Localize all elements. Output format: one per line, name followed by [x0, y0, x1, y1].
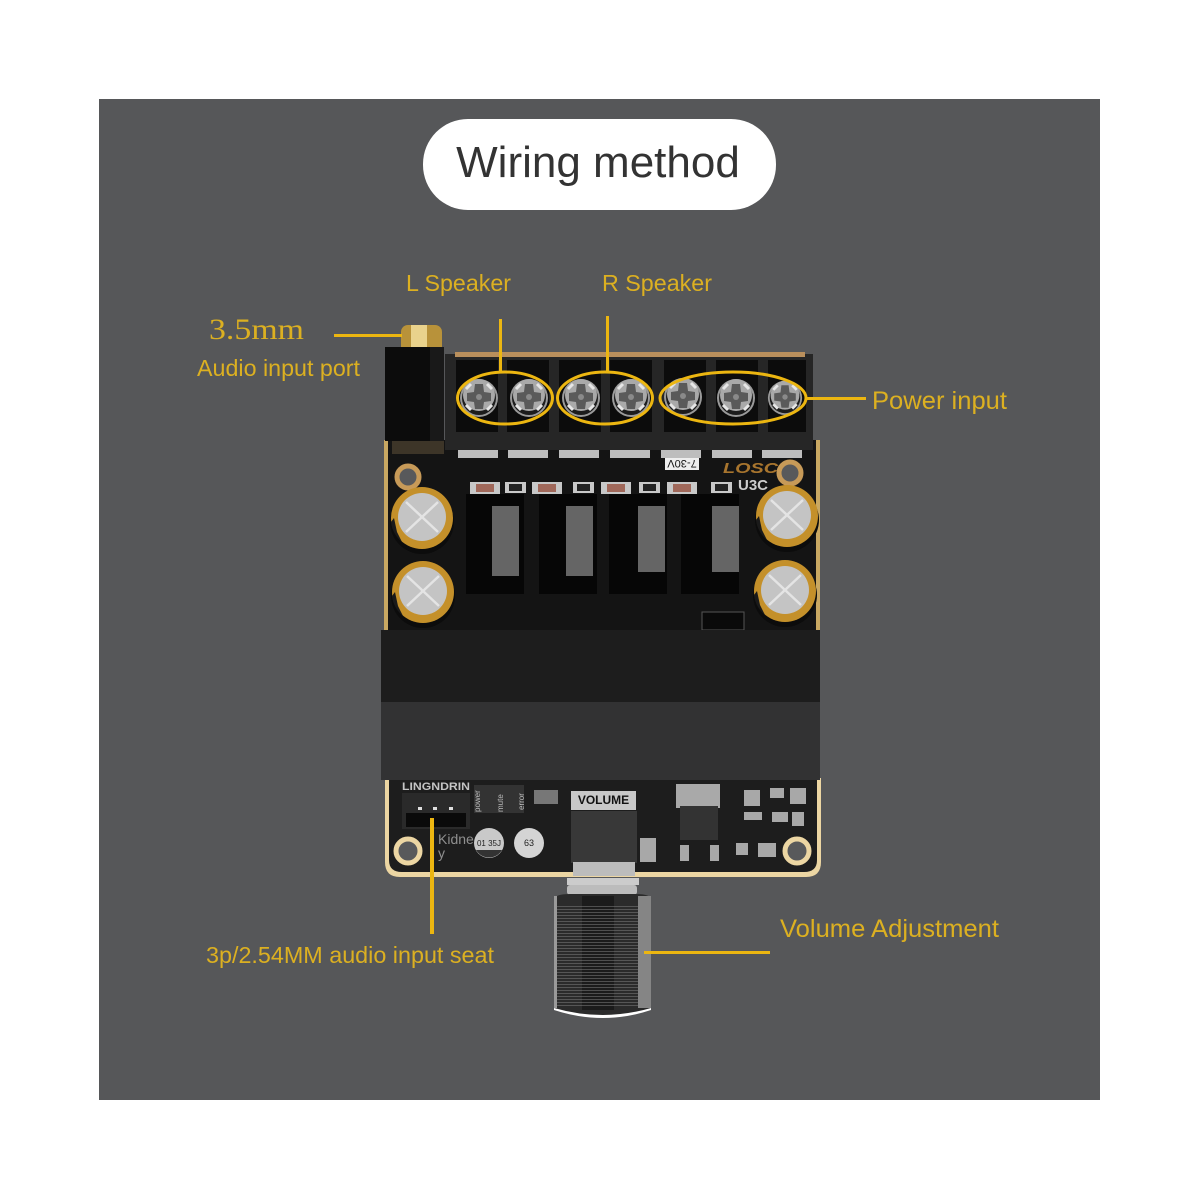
title pill: [423, 119, 776, 210]
mounting holes top: [397, 462, 801, 488]
amplifier board: [381, 325, 821, 1018]
SMD diode: [702, 612, 744, 630]
mounting holes bottom: [396, 839, 809, 863]
callout: Power input: [806, 387, 1007, 415]
brand marks: LOSC: [723, 460, 780, 477]
status indicators: power: [473, 790, 482, 812]
input connector: LINGNDRIN: [402, 781, 470, 793]
regulator and right components: [640, 784, 806, 862]
callout: Power input: Power input: [872, 387, 1007, 415]
callout: Volume Adjustment: [644, 915, 999, 954]
3.5mm jack: [385, 325, 444, 454]
brand marks: [723, 460, 780, 494]
callout ellipses: [458, 372, 806, 424]
callout: 3p audio input seat: 3p/2.54MM audio input seat: [206, 942, 495, 968]
callout: 3.5mm audio input port: [197, 313, 402, 381]
brand marks: U3C: [738, 477, 768, 494]
input connector: [402, 781, 470, 829]
PCB upper section: [384, 440, 820, 635]
callout: Volume Adjustment: Volume Adjustment: [780, 915, 999, 943]
volume knob: [554, 878, 651, 1018]
callout: 3.5mm audio input port: 3.5mm: [209, 313, 304, 346]
watermark: y: [438, 845, 445, 861]
callout: 3p audio input seat: [206, 818, 495, 968]
PCB lower section: [385, 778, 821, 877]
terminal block: [445, 352, 813, 458]
callout: R Speaker: [602, 270, 712, 373]
small SMD components: [470, 482, 732, 494]
volume label and potentiometer: VOLUME: [578, 793, 629, 807]
voltage label: 7-30V: [667, 457, 697, 469]
status indicators: [473, 785, 558, 813]
status indicators: error: [517, 793, 526, 810]
capacitors: [390, 485, 819, 628]
callout: R Speaker: R Speaker: [602, 270, 712, 296]
callout: L Speaker: L Speaker: [406, 270, 511, 296]
small capacitors: 63: [524, 838, 534, 848]
power inductors: [466, 494, 739, 594]
screws: [460, 378, 802, 417]
status indicators: mute: [496, 794, 505, 812]
watermark: Kidne: [438, 831, 474, 847]
callout: L Speaker: [406, 270, 511, 373]
small capacitors: 01 35J: [477, 839, 501, 848]
callout: 3.5mm audio input port: Audio input port: [197, 355, 361, 381]
watermark: [438, 831, 474, 861]
small capacitors: [474, 828, 544, 858]
heatsink: [381, 630, 820, 780]
volume label and potentiometer: [571, 791, 637, 876]
title pill: Wiring method: [456, 138, 740, 187]
background panel: [99, 99, 1100, 1100]
